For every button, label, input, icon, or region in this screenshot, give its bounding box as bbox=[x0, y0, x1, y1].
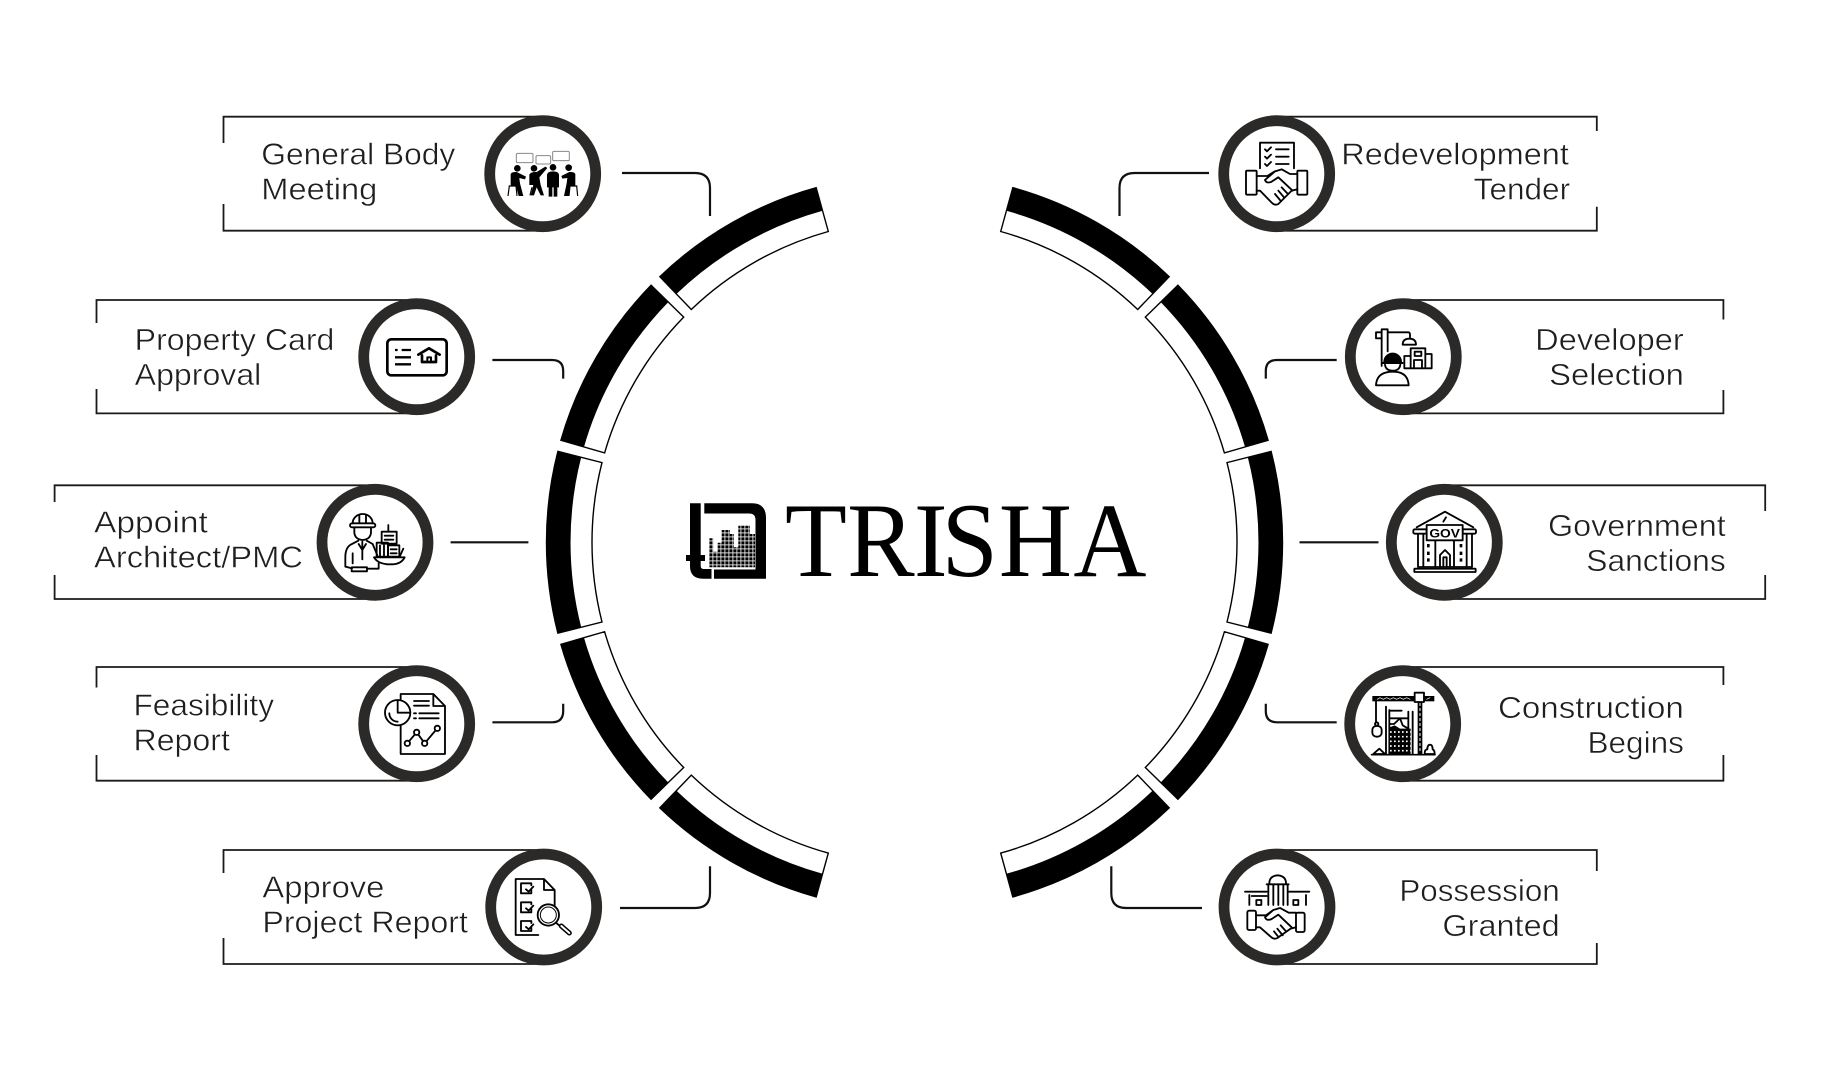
connector: Redevelopment Tender bbox=[1120, 173, 1209, 216]
step: Feasibility Report bbox=[96, 667, 470, 781]
icon: architect with buildings bbox=[345, 514, 405, 571]
icon ring bbox=[1224, 854, 1330, 960]
icon: meeting people bbox=[508, 151, 578, 197]
step text: Meeting bbox=[261, 172, 377, 207]
label box bbox=[55, 485, 375, 599]
connector: Feasibility Report bbox=[492, 704, 563, 722]
icon ring bbox=[364, 671, 470, 777]
logo mark bbox=[686, 503, 766, 579]
arc segment: right 2 bbox=[1145, 285, 1268, 453]
step text: Developer bbox=[1535, 322, 1684, 357]
arc segment: right 5 bbox=[1001, 775, 1169, 897]
step text: Feasibility bbox=[134, 688, 275, 722]
icon: report with charts bbox=[385, 694, 445, 754]
arc segment: right 3 bbox=[1227, 451, 1283, 633]
step text: Tender bbox=[1474, 172, 1570, 207]
step: Property Card Approval bbox=[96, 300, 470, 413]
label box bbox=[96, 667, 417, 781]
arc segment: left 5 bbox=[660, 775, 828, 897]
icon ring bbox=[491, 854, 597, 960]
step text: Redevelopment bbox=[1341, 137, 1569, 172]
icon: government building bbox=[1413, 512, 1476, 572]
connector: Property Card Approval bbox=[492, 360, 563, 379]
icon: building and handshake bbox=[1245, 875, 1309, 939]
icon ring bbox=[1350, 671, 1456, 777]
arc segment: left 1 bbox=[660, 188, 828, 310]
label box bbox=[224, 850, 544, 964]
logo wordmark: TRISHA bbox=[785, 483, 1147, 600]
step text: Granted bbox=[1442, 908, 1560, 943]
label box bbox=[96, 300, 417, 413]
icon: property card bbox=[387, 339, 447, 375]
connector: Possession Granted bbox=[1111, 866, 1202, 908]
connector: Appoint Architect/PMC bbox=[451, 541, 528, 543]
label box bbox=[1277, 117, 1597, 231]
step text: Project Report bbox=[262, 905, 468, 940]
connector: General Body Meeting bbox=[622, 173, 710, 216]
step text: Begins bbox=[1588, 725, 1684, 760]
step: Government Sanctions bbox=[1391, 485, 1765, 599]
step text: Report bbox=[134, 722, 230, 758]
step: Developer Selection bbox=[1350, 300, 1723, 413]
step text: Selection bbox=[1549, 357, 1684, 392]
label box bbox=[224, 117, 543, 231]
step: Redevelopment Tender bbox=[1224, 117, 1597, 231]
arc segment: right 1 bbox=[1001, 188, 1169, 310]
icon: government building: GOV bbox=[1429, 527, 1460, 541]
connector: Government Sanctions bbox=[1300, 541, 1378, 543]
step: Possession Granted bbox=[1224, 850, 1597, 964]
step text: General Body bbox=[261, 137, 456, 172]
arc segment: left 2 bbox=[561, 285, 684, 453]
step: Appoint Architect/PMC bbox=[55, 485, 428, 599]
icon ring bbox=[1350, 304, 1456, 410]
label box bbox=[1403, 300, 1723, 413]
step text: Property Card bbox=[135, 322, 334, 357]
step: Approve Project Report bbox=[224, 850, 597, 964]
label box bbox=[1444, 485, 1765, 599]
icon: checklist with magnifier bbox=[516, 879, 569, 935]
label box bbox=[1403, 667, 1723, 781]
label box bbox=[1277, 850, 1597, 964]
step text: Approval bbox=[135, 357, 261, 392]
step text: Sanctions bbox=[1586, 543, 1726, 578]
step text: Architect/PMC bbox=[94, 539, 303, 574]
arc segment: left 3 bbox=[546, 451, 602, 633]
icon ring bbox=[490, 121, 596, 227]
central ring of arc segments bbox=[546, 188, 1283, 897]
step: General Body Meeting bbox=[224, 117, 596, 231]
connector: Construction Begins bbox=[1266, 704, 1337, 722]
icon ring bbox=[1391, 489, 1497, 595]
step: Construction Begins bbox=[1350, 667, 1723, 781]
step text: Construction bbox=[1498, 690, 1684, 725]
logo bbox=[686, 483, 1147, 600]
connector: Approve Project Report bbox=[620, 866, 710, 908]
icon ring bbox=[1224, 121, 1330, 227]
icon: handshake and tender document bbox=[1246, 143, 1307, 205]
arc segment: right 4 bbox=[1145, 632, 1268, 799]
connector: Developer Selection bbox=[1266, 360, 1337, 379]
step text: Possession bbox=[1399, 873, 1560, 908]
icon: construction crane bbox=[1372, 693, 1435, 755]
icon ring bbox=[364, 304, 470, 410]
icon: developer with crane bbox=[1376, 329, 1432, 385]
icon ring bbox=[322, 489, 428, 595]
arc segment: left 4 bbox=[561, 632, 684, 799]
step text: Government bbox=[1548, 508, 1726, 543]
step text: Approve bbox=[262, 870, 384, 905]
step text: Appoint bbox=[94, 504, 208, 539]
